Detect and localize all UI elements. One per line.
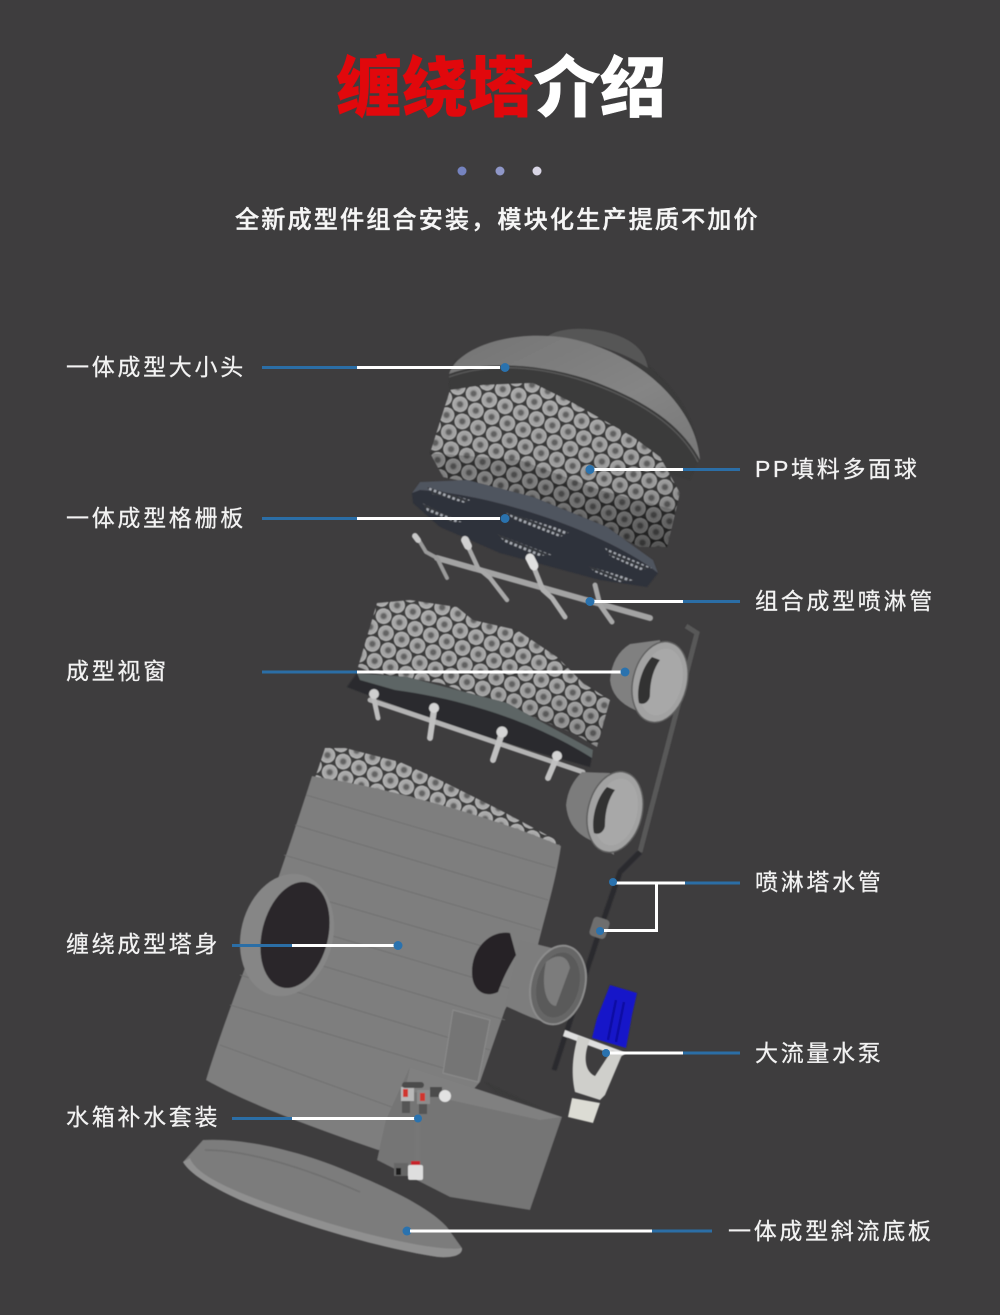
callout: 喷淋塔水管: 喷淋塔水管 [755, 869, 884, 895]
callout: 水箱补水套装 [66, 1104, 422, 1130]
callout: 组合成型喷淋管 [586, 588, 935, 614]
callout: 水箱补水套装: 水箱补水套装 [66, 1104, 220, 1130]
callout: 一体成型大小头: 一体成型大小头 [66, 354, 246, 380]
callout: 一体成型格栅板: 一体成型格栅板 [66, 505, 246, 531]
water tank [377, 1067, 562, 1210]
callout: 喷淋塔水管 [596, 869, 884, 935]
window flange upper [610, 636, 696, 728]
window flange lower [566, 766, 651, 858]
callout: 成型视窗: 成型视窗 [66, 658, 169, 684]
grating plate middle [347, 673, 593, 767]
exploded tower illustration [183, 329, 700, 1257]
title: 缠绕塔介绍 [336, 51, 666, 125]
callout: 组合成型喷淋管: 组合成型喷淋管 [755, 588, 935, 614]
pump [563, 985, 637, 1123]
filler balls middle [358, 600, 610, 747]
make-up water valves [394, 1082, 451, 1180]
side nozzle [505, 940, 594, 1030]
callout: 一体成型斜流底板 [402, 1218, 934, 1244]
thin water pipe [554, 626, 697, 1070]
filler balls lower [315, 748, 560, 862]
decorative dots [458, 166, 542, 176]
callout: 一体成型斜流底板: 一体成型斜流底板 [728, 1218, 934, 1244]
dome head [449, 329, 700, 480]
callout: PP填料多面球: PP填料多面球 [755, 456, 920, 482]
tower body [206, 776, 561, 1150]
callout: 一体成型大小头 [66, 354, 510, 380]
callout: 缠绕成型塔身: 缠绕成型塔身 [66, 931, 220, 957]
filler balls upper [430, 383, 680, 547]
spray pipe upper [415, 536, 650, 622]
bottom plate [183, 1140, 462, 1257]
callout: PP填料多面球 [586, 456, 920, 482]
callout: 缠绕成型塔身 [66, 931, 402, 957]
callout: 成型视窗 [66, 658, 630, 684]
grating plate [412, 480, 658, 587]
subtitle: 全新成型件组合安装，模块化生产提质不加价 [235, 207, 760, 234]
callout: 一体成型格栅板 [66, 505, 510, 531]
callout: 大流量水泵: 大流量水泵 [755, 1040, 884, 1066]
spray pipe middle [369, 689, 583, 778]
callout: 大流量水泵 [602, 1040, 884, 1066]
